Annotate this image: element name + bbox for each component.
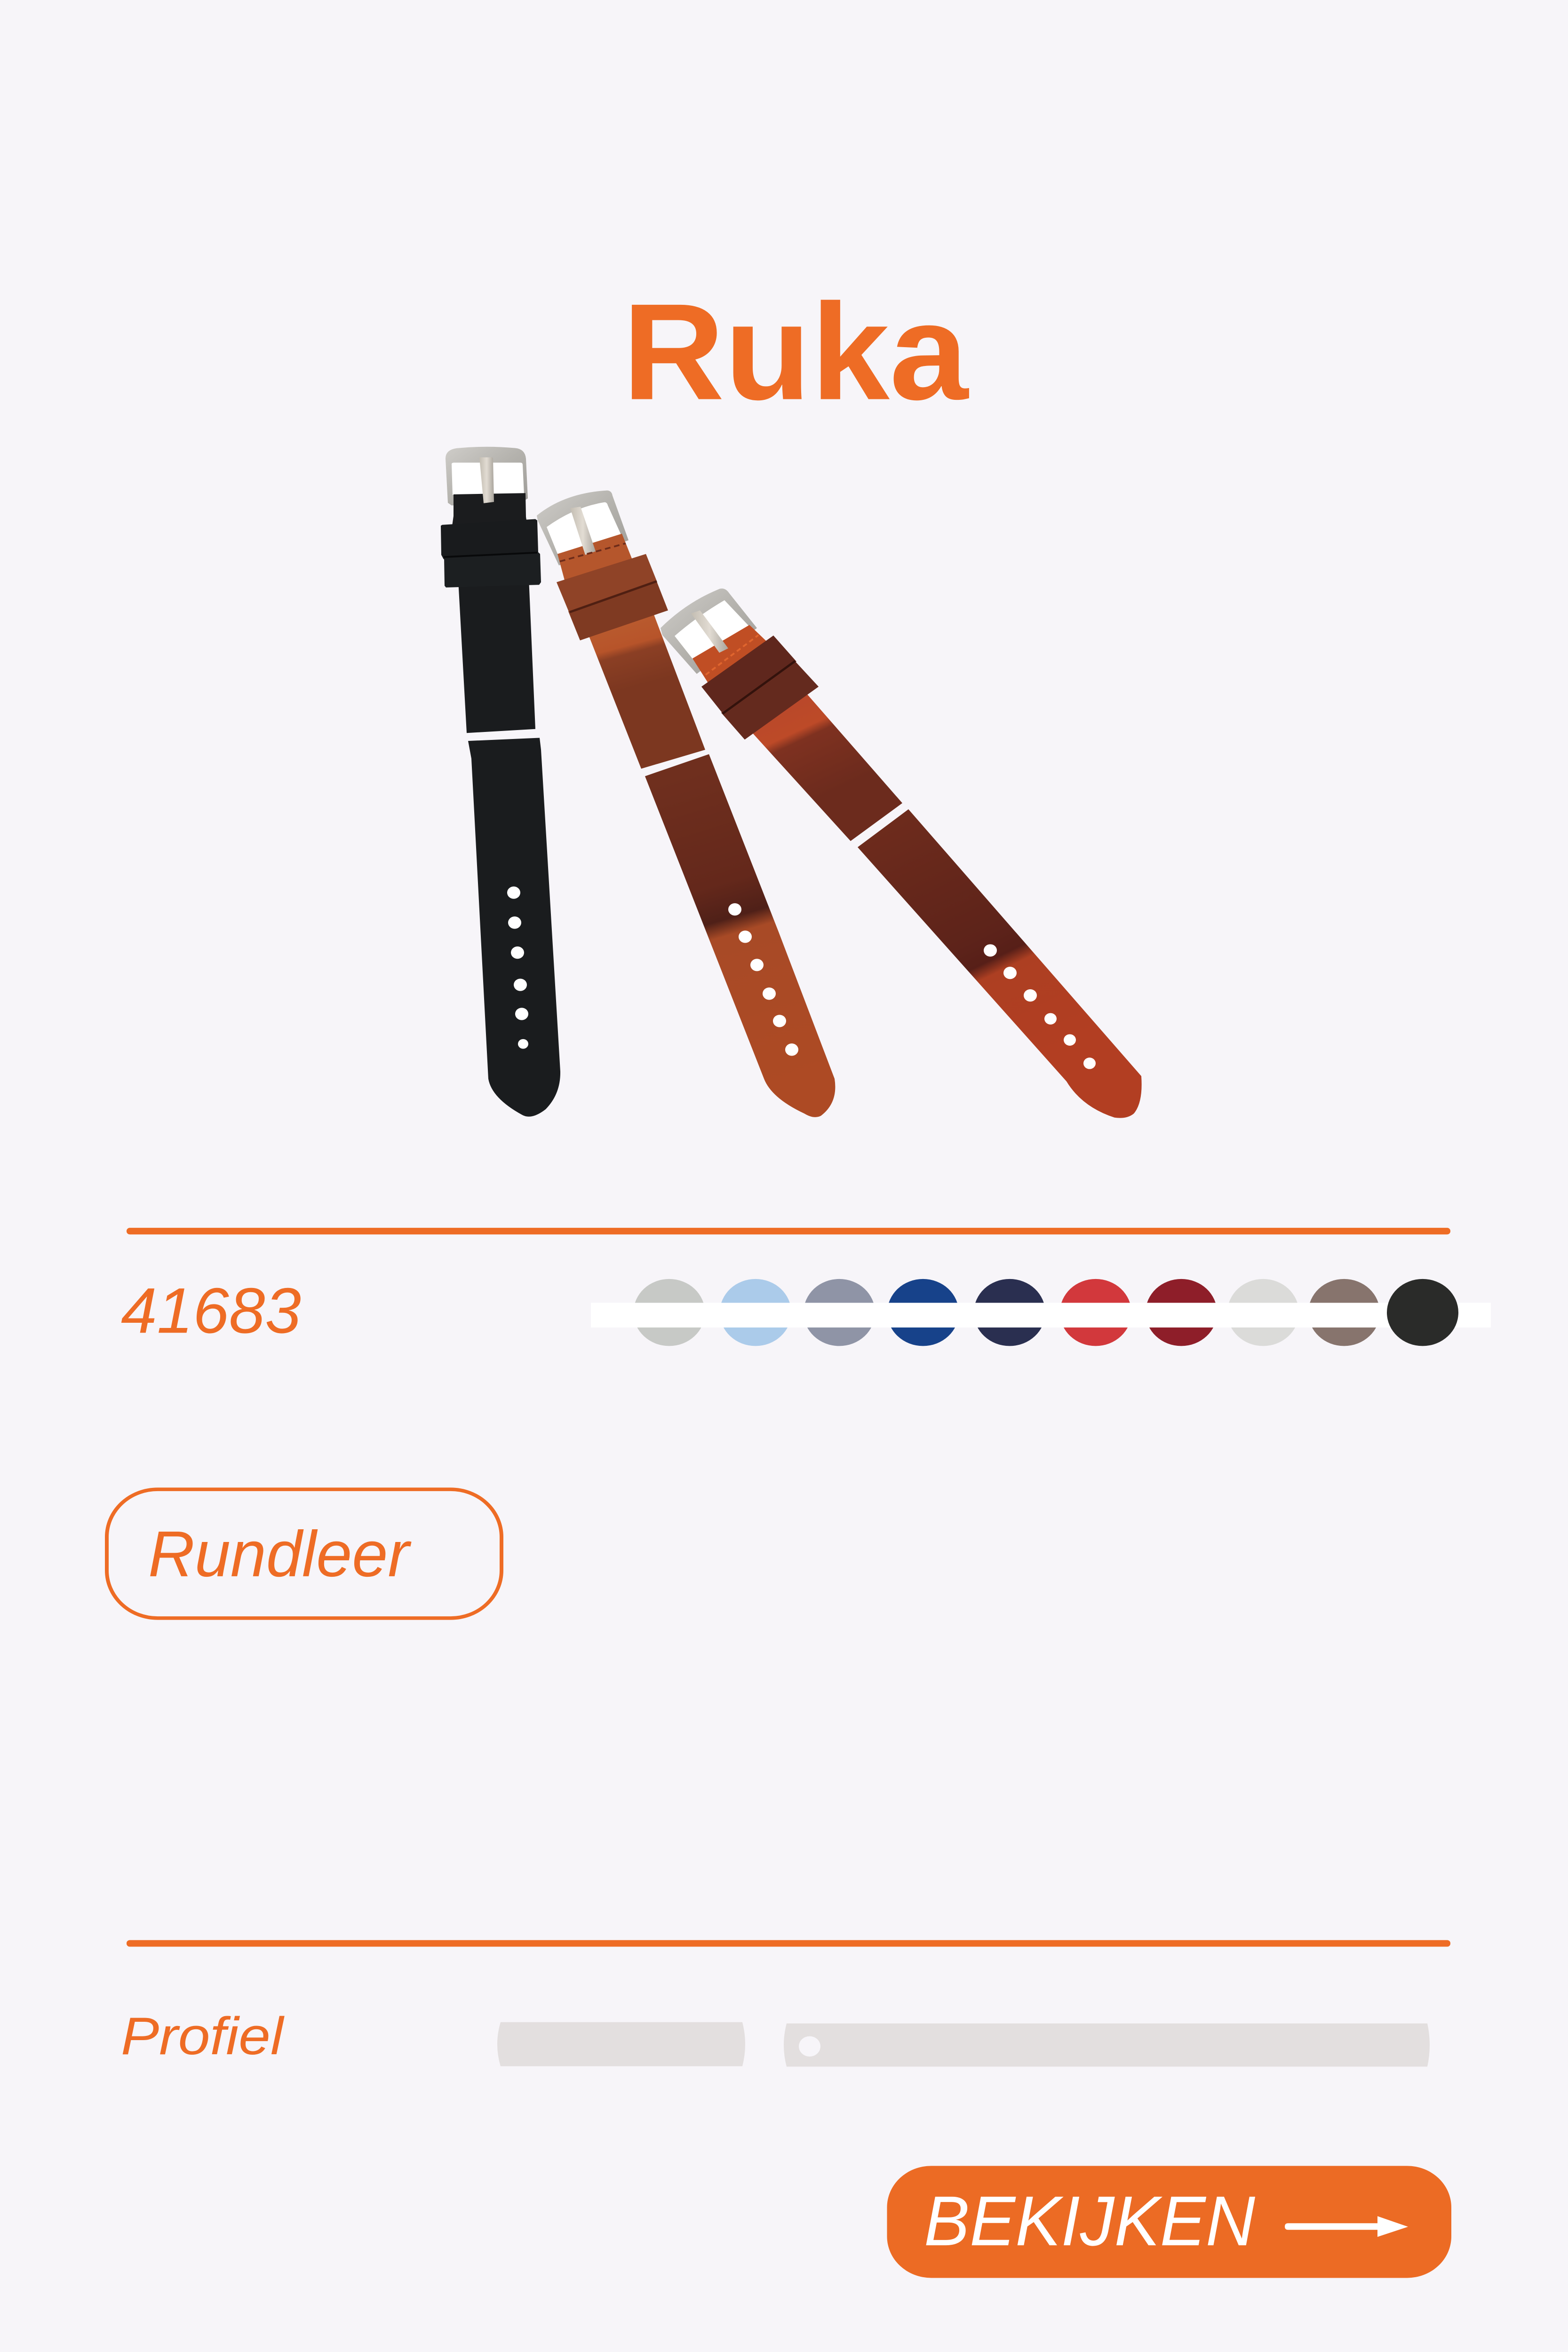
strap: medium brown (537, 491, 835, 1117)
swatch: light grey (633, 1279, 705, 1346)
strap holes (728, 903, 798, 1056)
swatch: burgundy (1146, 1279, 1217, 1346)
white band over swatches (591, 1303, 1491, 1327)
swatch: royal blue (887, 1279, 959, 1346)
colour swatches (591, 1279, 1491, 1346)
strap holes (984, 944, 1096, 1069)
swatch: black (1387, 1279, 1458, 1346)
product photo: three watch straps (441, 447, 1142, 1118)
material pill: Rundleer (148, 1518, 412, 1590)
divider: bottom (127, 1940, 1450, 1947)
arrow (1285, 2216, 1408, 2237)
strap holes (507, 886, 528, 1049)
button: BEKIJKEN (924, 2182, 1256, 2260)
strap: red brown (661, 588, 1142, 1118)
swatch: light blue (720, 1279, 791, 1346)
profile label: Profiel (121, 2007, 285, 2066)
swatch: navy (974, 1279, 1045, 1346)
swatch: red (1060, 1279, 1131, 1346)
swatch: taupe (1308, 1279, 1380, 1346)
swatch: grey blue (804, 1279, 875, 1346)
swatch: pale grey (1227, 1279, 1299, 1346)
profile diagram: long strap piece (784, 2024, 1430, 2066)
strap: black (441, 447, 560, 1117)
divider: top (127, 1228, 1450, 1234)
title: Ruka (622, 275, 969, 428)
material pill (107, 1489, 501, 1618)
article number: 41683 (121, 1274, 301, 1346)
profile diagram: short strap piece (497, 2022, 745, 2066)
button (887, 2166, 1451, 2278)
